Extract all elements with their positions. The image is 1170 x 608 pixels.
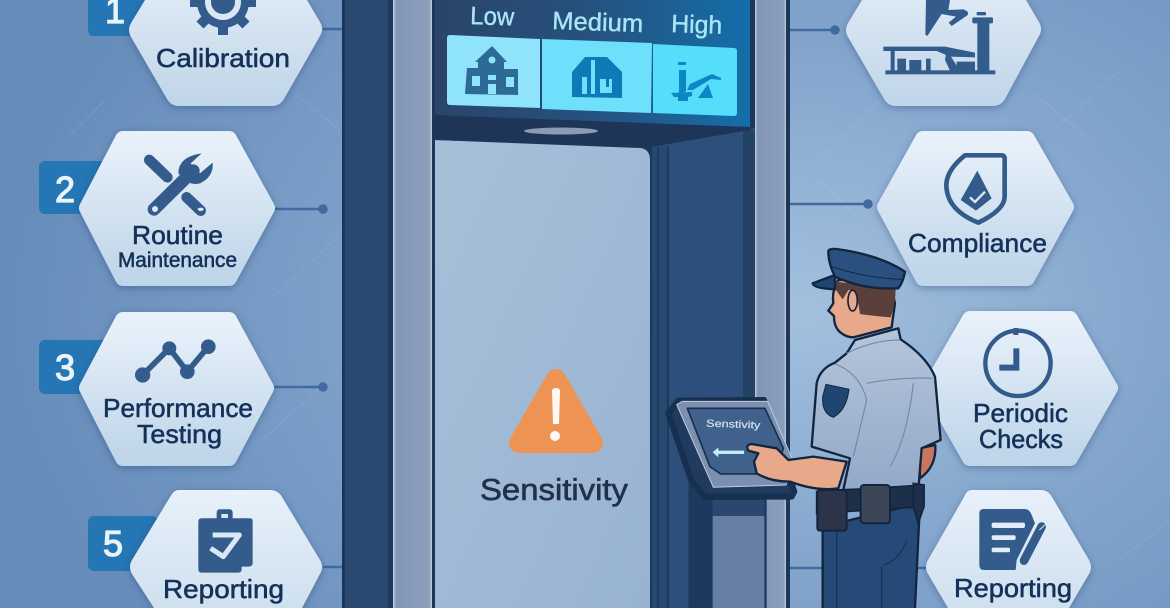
text: Reporting — [163, 574, 284, 604]
panel: Periodic Checks — [930, 319, 1110, 458]
connector lines — [274, 26, 926, 568]
panel: 1 Calibration — [88, 0, 322, 106]
control kiosk — [668, 400, 794, 608]
icon: shield — [946, 155, 1005, 223]
text: Checks — [979, 424, 1063, 454]
text: Performance — [103, 393, 253, 423]
trousers — [823, 503, 920, 608]
badge 2 — [39, 161, 109, 214]
Sensitivity label: Sensitivity — [480, 472, 629, 507]
badge 5 — [88, 516, 158, 571]
text: Reporting — [954, 573, 1072, 603]
badge 2: 2 — [55, 169, 75, 210]
label: Medium: Medium — [552, 7, 644, 38]
badge 5: 5 — [103, 523, 123, 564]
text: Calibration — [156, 43, 290, 73]
text: Routine — [132, 220, 223, 250]
icon: airport — [883, 0, 995, 74]
shoulder patch — [823, 384, 849, 417]
label: Low: Low — [470, 2, 516, 32]
text: Testing — [137, 419, 222, 449]
kiosk arrow — [713, 447, 744, 457]
belt and pouches — [817, 483, 924, 531]
text: Maintenance — [118, 249, 237, 272]
high cell with refinery icon — [653, 44, 737, 116]
label: High: High — [671, 10, 723, 40]
icon: clipboard check — [198, 509, 253, 573]
shirt — [812, 328, 941, 490]
door opening panel — [435, 140, 650, 608]
walk-through detector gate — [342, 0, 790, 608]
panel: airport — [846, 0, 1041, 106]
panel: 3 Performance Testing — [39, 320, 266, 458]
text — [118, 220, 237, 272]
sensitivity display — [435, 0, 750, 127]
low cell with school icon — [447, 35, 540, 108]
icon: document and pencil — [979, 509, 1046, 570]
icon: clock — [985, 328, 1051, 396]
cap — [813, 249, 905, 289]
text: Compliance — [908, 228, 1047, 258]
far arm — [919, 445, 935, 478]
panel: 2 Routine Maintenance — [39, 139, 267, 278]
badge 3 — [39, 340, 109, 394]
medium cell with warehouse icon — [542, 39, 652, 113]
kiosk label: Senstivity — [706, 419, 762, 432]
icon: tools — [149, 153, 213, 212]
icon: line chart — [135, 339, 216, 383]
panel: Reporting right — [926, 490, 1091, 608]
icon: gear — [190, 0, 256, 35]
security officer — [747, 249, 941, 608]
text: Periodic — [973, 398, 1068, 428]
badge 1 — [88, 0, 158, 36]
neck and head — [828, 280, 896, 337]
warning triangle — [519, 379, 593, 443]
panel: 5 Reporting left — [88, 490, 322, 608]
badge 3: 3 — [55, 347, 75, 388]
text — [103, 393, 253, 449]
text — [973, 398, 1068, 454]
panel: Compliance — [885, 139, 1066, 278]
forearm and hand — [747, 444, 847, 489]
